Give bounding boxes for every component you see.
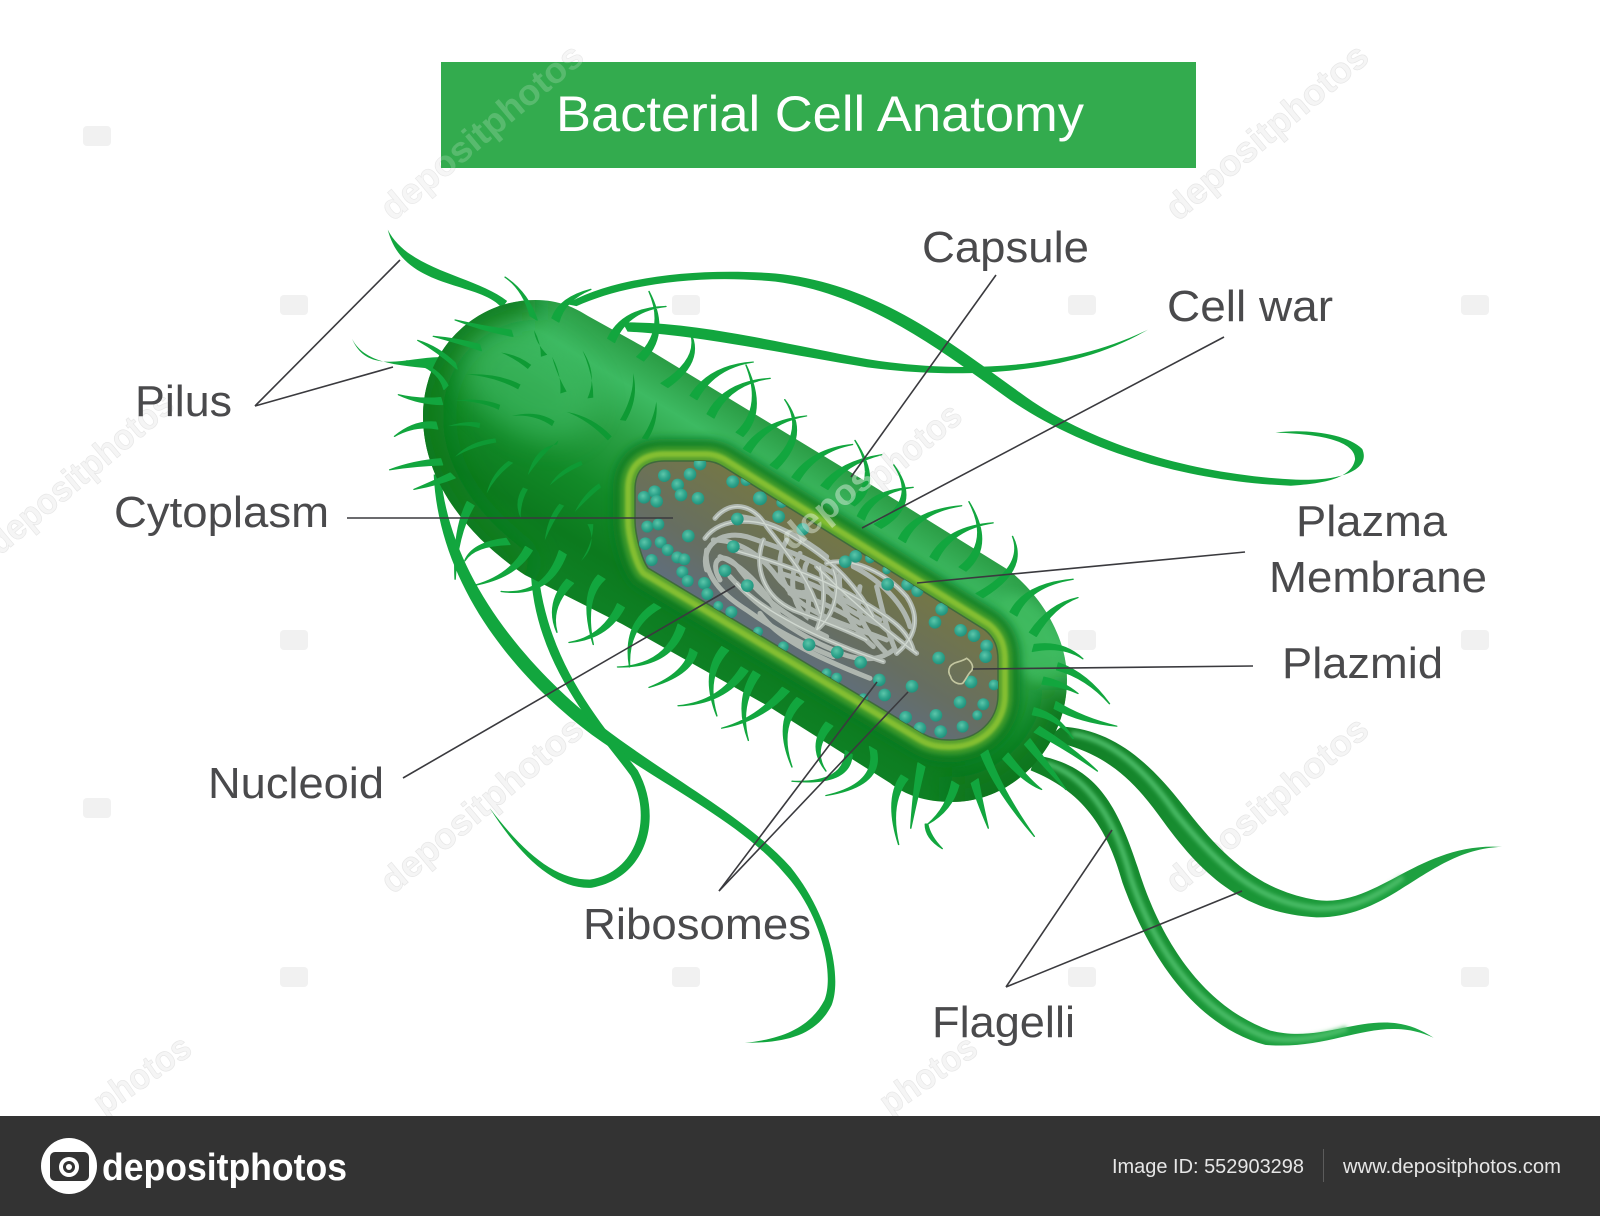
label: Cell war: Cell war — [1167, 282, 1333, 331]
watermark: background pattern: photos — [859, 394, 969, 496]
watermark: background pattern: depositphotos — [372, 35, 591, 228]
label: Pilus: Pilus — [135, 377, 232, 426]
watermark: background pattern: photos — [85, 1026, 199, 1123]
icon: camera logo — [41, 1138, 97, 1194]
body shading — [423, 300, 1078, 802]
nucleoid and ribosomes in cytoplasm — [638, 458, 999, 738]
label: Flagelli — [932, 830, 1242, 1047]
label: Ribosomes — [583, 682, 908, 949]
watermark: background pattern: depositphotos — [1157, 708, 1376, 901]
label: Nucleoid: Nucleoid — [208, 759, 384, 808]
flagella — [1031, 727, 1502, 1046]
label: Cell war — [862, 282, 1333, 528]
title banner: depositphotos — [372, 35, 591, 228]
footer bar: www.depositphotos.com — [1342, 1156, 1561, 1178]
label: Ribosomes: Ribosomes — [583, 900, 811, 949]
watermark: background pattern: photos — [871, 1026, 985, 1123]
watermark: background pattern — [0, 35, 1376, 1123]
pili on body edge — [390, 277, 1117, 849]
label: Capsule — [851, 223, 1089, 477]
label: Plazma Membrane — [917, 497, 1487, 602]
watermark: background pattern: depositphotos — [1157, 35, 1376, 228]
plasmid — [949, 658, 973, 684]
nucleoid — [705, 507, 917, 678]
label: Pilus — [135, 260, 400, 426]
label: Plazma Membrane: Plazma — [1296, 497, 1448, 546]
ribosomes — [638, 458, 999, 738]
bacterial body — [423, 300, 1078, 802]
watermark: background pattern: depositphotos — [372, 708, 591, 901]
label: Plazmid — [973, 639, 1443, 688]
label: Plazmid: Plazmid — [1282, 639, 1443, 688]
label: Flagelli: Flagelli — [932, 998, 1075, 1047]
cell wall and plasma membrane window — [635, 461, 998, 740]
pili on body surface — [448, 330, 657, 561]
watermark over the body: depos — [771, 456, 881, 558]
title banner: Bacterial Cell Anatomy — [556, 86, 1084, 142]
long pili behind the body — [352, 230, 1364, 1043]
title banner — [372, 35, 1196, 228]
capsule body shape — [423, 300, 1067, 802]
label: Plazma Membrane: Membrane — [1269, 553, 1487, 602]
label: Nucleoid — [208, 586, 735, 808]
footer bar: depositphotos — [102, 1147, 347, 1189]
label: Capsule: Capsule — [922, 223, 1089, 272]
label: Cytoplasm: Cytoplasm — [114, 488, 329, 537]
watermark: camera marks — [83, 126, 1489, 987]
footer bar — [0, 1116, 1600, 1216]
footer bar: Image ID: 552903298 — [1112, 1156, 1304, 1178]
